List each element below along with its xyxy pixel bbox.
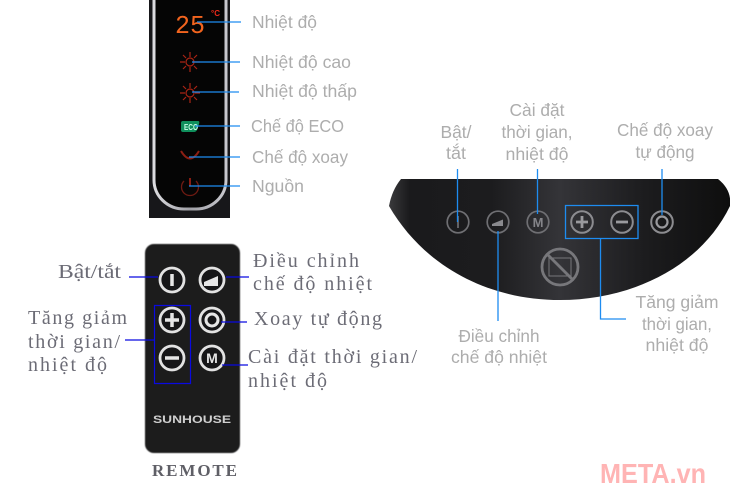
label: raise lower time temperature: Tăng giảm xyxy=(28,307,127,329)
leader lines xyxy=(189,22,241,186)
panel: heater base xyxy=(389,179,730,300)
label: set time temperature xyxy=(502,100,572,164)
icon: power xyxy=(182,178,198,196)
label: on off: tắt xyxy=(446,142,466,163)
label: on off: Bật/tắt xyxy=(58,261,122,283)
button: minus xyxy=(160,346,184,370)
button: swing xyxy=(200,308,224,332)
icon: eco leaf xyxy=(181,121,199,132)
display inner pill xyxy=(154,0,226,209)
label: set time temperature xyxy=(248,346,417,392)
label: set time temperature: Cài đặt thời gian/ xyxy=(248,346,417,368)
leader lines and bracket xyxy=(458,169,662,321)
celsius mark: °C xyxy=(211,9,220,18)
label: power: Nguồn xyxy=(252,176,304,196)
button: plus xyxy=(571,211,593,233)
label: remote caption: REMOTE xyxy=(152,461,237,480)
remote body xyxy=(145,244,240,453)
label: set time temperature: Cài đặt xyxy=(510,100,565,120)
panel: heater display xyxy=(149,0,230,218)
label: auto swing xyxy=(617,120,713,162)
label: heat mode adjust: chế độ nhiệt xyxy=(451,347,547,367)
label: on off xyxy=(440,122,472,163)
label: auto swing: Xoay tự động xyxy=(254,308,382,330)
base callouts xyxy=(440,100,718,367)
label: set time temperature: thời gian, xyxy=(502,122,572,142)
label: raise lower time temperature xyxy=(28,307,127,376)
panel: remote control xyxy=(145,244,240,453)
brand: SUNHOUSE xyxy=(153,414,231,426)
label: set time temperature: nhiệt độ xyxy=(248,370,327,392)
label: heat mode adjust: Điều chỉnh xyxy=(253,250,359,272)
button: mode M xyxy=(200,346,224,370)
button: M xyxy=(527,211,549,233)
label: raise lower time temperature: nhiệt độ xyxy=(646,335,708,355)
button: swing xyxy=(651,211,673,233)
label: set time temperature: nhiệt độ xyxy=(506,144,568,164)
button: minus xyxy=(611,211,633,233)
label: on off: Bật/ xyxy=(440,122,472,142)
label: temperature: Nhiệt độ xyxy=(252,12,317,32)
label: swing mode: Chế độ xoay xyxy=(252,147,348,167)
label: raise lower time temperature: thời gian, xyxy=(642,314,712,334)
icon: swing arc xyxy=(181,151,199,158)
display callouts xyxy=(189,12,357,196)
label: heat mode adjust: Điều chỉnh xyxy=(458,326,540,346)
label: heat mode adjust xyxy=(253,250,372,295)
label: heat mode adjust xyxy=(451,326,547,367)
button: on off xyxy=(447,211,469,233)
label: raise lower time temperature: Tăng giảm xyxy=(636,292,718,312)
icon: eco leaf: ECO xyxy=(184,122,198,132)
label: auto swing: tự động xyxy=(636,142,694,162)
button: power xyxy=(160,268,184,292)
label: low temperature: Nhiệt độ thấp xyxy=(252,81,357,101)
label: auto swing: Chế độ xoay xyxy=(617,120,713,140)
button: plus xyxy=(160,308,184,332)
label: high temperature: Nhiệt độ cao xyxy=(252,52,351,72)
remote callouts xyxy=(28,250,417,480)
icon: prohibited cover xyxy=(542,249,578,285)
icon: low heat sun xyxy=(180,83,200,103)
label: raise lower time temperature: thời gian/ xyxy=(28,331,120,353)
button: heat level xyxy=(487,211,509,233)
label: raise lower time temperature: nhiệt độ xyxy=(28,354,107,376)
button: heat level xyxy=(200,268,224,292)
leader lines and bracket xyxy=(125,277,249,384)
label: eco mode: Chế độ ECO xyxy=(251,116,344,136)
temperature readout: 25 xyxy=(175,11,205,41)
label: heat mode adjust: chế độ nhiệt xyxy=(253,273,372,295)
base body xyxy=(389,179,730,300)
button: mode M: M xyxy=(206,350,218,366)
icon: high heat sun xyxy=(180,52,200,72)
display body xyxy=(149,0,230,218)
button: M: M xyxy=(533,215,543,230)
label: raise lower time temperature xyxy=(636,292,718,355)
